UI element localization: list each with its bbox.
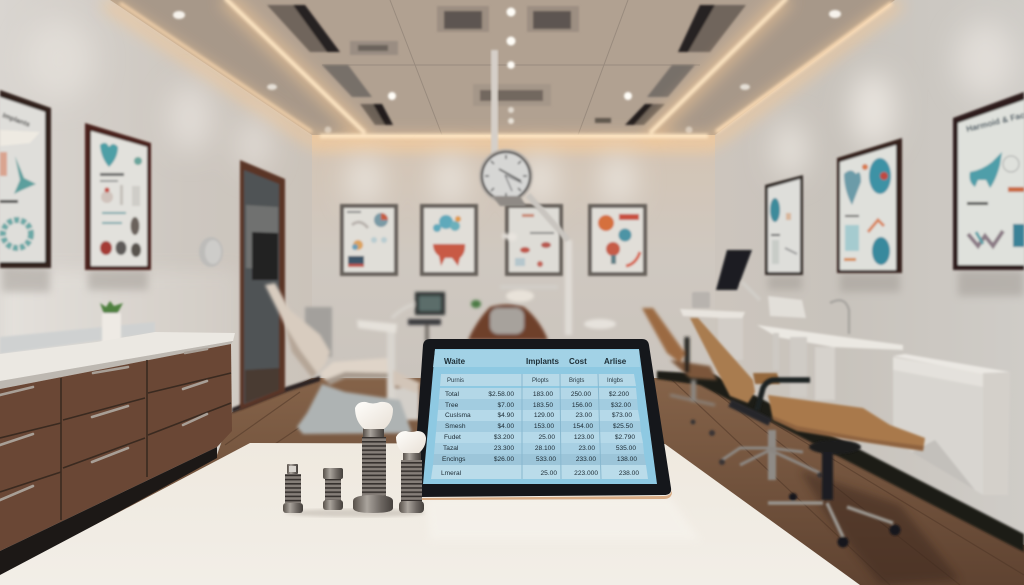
small monitor	[408, 292, 445, 345]
header labels: Waite	[444, 357, 466, 366]
back poster 3	[505, 204, 563, 276]
small implant 2	[323, 468, 343, 510]
table values: Fudet	[444, 434, 461, 441]
table values: 238.00	[619, 470, 639, 477]
table values: 23.300	[494, 445, 514, 452]
table values: 183.50	[533, 402, 553, 409]
table values: 23.00	[578, 445, 595, 452]
table values: $73.00	[612, 412, 632, 419]
back poster 2	[420, 204, 478, 276]
clock	[479, 149, 533, 206]
brown headrest	[468, 304, 548, 340]
subheader labels: Plopts	[532, 378, 549, 384]
subheader labels: Inlgbs	[607, 378, 623, 384]
table values: $2.200	[609, 391, 629, 398]
pole	[491, 50, 498, 155]
left wall	[0, 0, 312, 412]
header labels: Cost	[569, 357, 587, 366]
table values: Enclngs	[442, 456, 466, 463]
dental tray	[357, 320, 397, 333]
dark plinth	[0, 447, 217, 577]
table values: 183.00	[533, 391, 553, 398]
subheader band	[440, 374, 636, 386]
table values: $32.00	[611, 402, 631, 409]
table values: Lmeral	[441, 470, 462, 477]
table values: $26.00	[494, 456, 514, 463]
door	[240, 160, 285, 410]
chair seat	[768, 395, 925, 451]
dental chair	[265, 283, 420, 434]
table values: 533.00	[536, 456, 556, 463]
table	[0, 443, 860, 585]
plant on back counter	[471, 300, 481, 308]
poster text: Implants	[1, 112, 31, 129]
table values: 535.00	[616, 445, 636, 452]
table values: 154.00	[573, 423, 593, 430]
arm	[528, 195, 568, 240]
table values: 28.100	[535, 445, 555, 452]
table values: $4.00	[497, 423, 514, 430]
wall sensor	[199, 237, 223, 267]
table values: $7.00	[497, 402, 514, 409]
middle chair base	[768, 430, 776, 480]
subheader labels: Brigts	[569, 378, 584, 384]
large implant with crown	[353, 402, 393, 513]
header labels	[444, 357, 627, 366]
rear brown chair	[642, 308, 717, 405]
chair pedestal	[809, 440, 861, 454]
table values: $2.58.00	[488, 391, 514, 398]
poster wall shadows	[2, 266, 1024, 296]
table values: 23.00	[575, 412, 592, 419]
left counter and cabinets	[0, 301, 235, 577]
lamp stand	[500, 233, 616, 335]
small implant 1	[283, 464, 303, 513]
table values: Total	[445, 391, 459, 398]
table values: $2.790	[615, 434, 635, 441]
drawer divisions	[0, 360, 231, 520]
table values: 25.00	[538, 434, 555, 441]
header labels: Implants	[526, 357, 559, 366]
back wall posters	[340, 204, 647, 276]
implant shadow	[285, 509, 425, 517]
table values: 123.00	[574, 434, 594, 441]
ceiling vents	[267, 5, 746, 125]
ceiling	[100, 0, 905, 138]
wall monitor	[716, 250, 752, 290]
wall desk	[757, 325, 903, 350]
table values: 156.00	[572, 402, 592, 409]
header labels: Arlise	[604, 357, 627, 366]
table values: 250.00	[571, 391, 591, 398]
wall spotlights	[25, 20, 1015, 206]
tablet screen	[423, 349, 657, 484]
drawer handles	[0, 349, 207, 500]
chair back	[690, 318, 755, 403]
radiator box	[893, 354, 1010, 495]
front brown chair	[690, 318, 925, 548]
table values: Smesh	[445, 423, 466, 430]
left wall poster 2	[85, 123, 151, 270]
backsplash	[0, 322, 155, 354]
dental tray post	[387, 327, 395, 405]
table values	[441, 391, 639, 477]
table values: Tree	[445, 402, 459, 409]
background dental equipment	[265, 233, 616, 434]
right wall poster 3	[953, 92, 1024, 270]
cove glow lights	[105, 0, 900, 142]
chair arm	[757, 380, 810, 410]
right side wall desks and monitor	[680, 250, 903, 400]
table rows	[431, 374, 648, 479]
right wall	[715, 0, 1024, 545]
floor	[0, 371, 1024, 585]
lamp unit	[768, 296, 806, 318]
dental implants	[283, 402, 426, 517]
table values: $3.200	[494, 434, 514, 441]
header band	[433, 350, 640, 367]
table values: 25.00	[540, 470, 557, 477]
right wall poster 2	[837, 138, 902, 273]
middle brown chair	[690, 373, 823, 480]
table values: 138.00	[617, 456, 637, 463]
lower storage box	[395, 388, 419, 420]
left wall lower	[0, 270, 240, 412]
back poster 1	[340, 204, 398, 276]
medium implant with crown	[396, 431, 426, 513]
potted plant	[100, 301, 123, 343]
table values: 233.00	[576, 456, 596, 463]
table values: $25.50	[613, 423, 633, 430]
table values: Tazal	[443, 445, 459, 452]
back poster 4	[588, 204, 647, 276]
ceiling pole and clock	[479, 50, 568, 240]
counter top	[0, 332, 235, 381]
table values: Cuslsma	[445, 412, 471, 419]
small shelf	[680, 309, 745, 319]
table values: 153.00	[534, 423, 554, 430]
tablet reflection	[425, 497, 700, 540]
table values: 129.00	[534, 412, 554, 419]
right wall poster 1	[765, 175, 803, 275]
table values: $4.90	[497, 412, 514, 419]
cabinet body	[0, 344, 232, 551]
ceiling lights	[173, 8, 841, 134]
subheader labels	[447, 378, 623, 384]
subheader labels: Purnis	[447, 378, 464, 384]
chair star base	[768, 503, 893, 537]
tablet body	[413, 339, 671, 497]
back wall	[310, 135, 715, 380]
left wall poster 1	[0, 90, 51, 268]
table values: 223.000	[574, 470, 598, 477]
tablet with cost table	[413, 339, 672, 500]
grey side cabinet	[305, 307, 332, 357]
faucet	[830, 300, 849, 334]
